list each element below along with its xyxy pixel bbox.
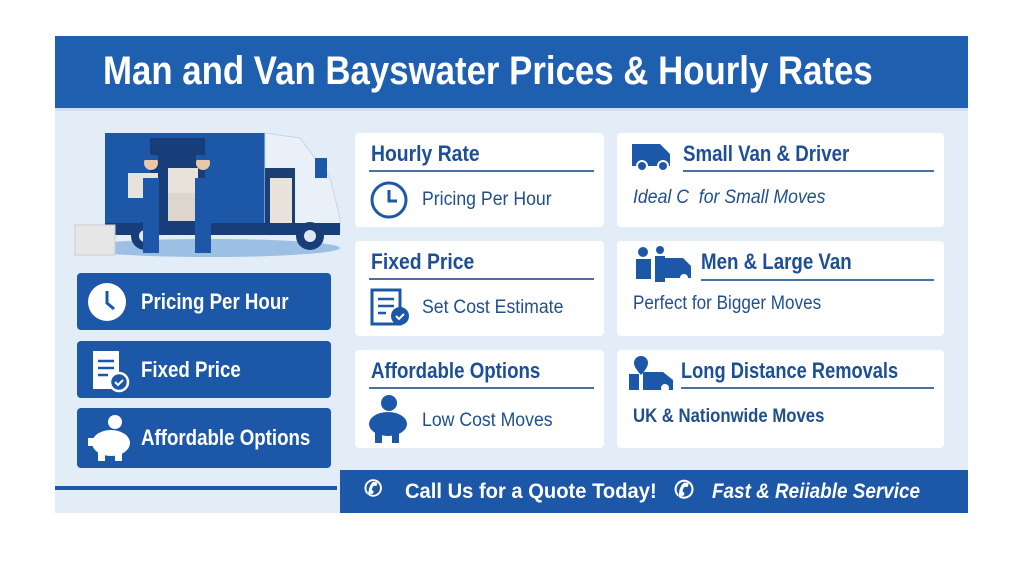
icon: phone: ✆ (364, 476, 382, 501)
button: affordable options: Affordable Options (141, 425, 310, 450)
card: fixed price (355, 241, 604, 336)
card: long distance removals (617, 350, 944, 448)
button: affordable options (77, 408, 331, 468)
icon: piggy bank (369, 395, 407, 443)
button: pricing per hour: Pricing Per Hour (141, 289, 289, 314)
icon: location van (629, 356, 673, 390)
card: hourly rate: Pricing Per Hour (422, 189, 552, 210)
card: fixed price: Fixed Price (371, 249, 474, 274)
icon: small van (632, 144, 670, 170)
button: fixed price (77, 341, 331, 398)
footer call to action bar (340, 470, 968, 513)
card: fixed price: Set Cost Estimate (422, 297, 563, 318)
card: men & large van: Men & Large Van (701, 249, 852, 274)
button: fixed price: Fixed Price (141, 357, 241, 382)
title: Man and Van Bayswater Prices & Hourly Rates (103, 49, 873, 93)
header bar (55, 36, 968, 111)
icon: phone ringing: ✆ (674, 477, 694, 504)
card: small van & driver (617, 133, 944, 227)
text: fast service: Fast & Reiiable Service (712, 480, 920, 503)
card: small van & driver: Ideal C for Small Moves (633, 187, 825, 208)
card: hourly rate (355, 133, 604, 227)
icon: estimate (370, 288, 409, 326)
background panel (55, 36, 968, 513)
card: affordable options: Low Cost Moves (422, 410, 553, 431)
card: affordable options: Affordable Options (371, 358, 540, 383)
illustration: van with movers (74, 132, 340, 257)
button: pricing per hour (77, 273, 331, 330)
card: long distance removals: UK & Nationwide Moves (633, 406, 824, 427)
card: affordable options (355, 350, 604, 448)
card: men & large van: Perfect for Bigger Moves (633, 293, 821, 314)
left divider line (55, 486, 337, 490)
card: small van & driver: Small Van & Driver (683, 141, 849, 166)
text: call us: Call Us for a Quote Today! (405, 480, 657, 503)
icon: men & van (636, 246, 691, 282)
icon: clock (370, 182, 408, 218)
card: men & large van (617, 241, 944, 336)
card: hourly rate: Hourly Rate (371, 141, 480, 166)
card: long distance removals: Long Distance Removals (681, 358, 898, 383)
